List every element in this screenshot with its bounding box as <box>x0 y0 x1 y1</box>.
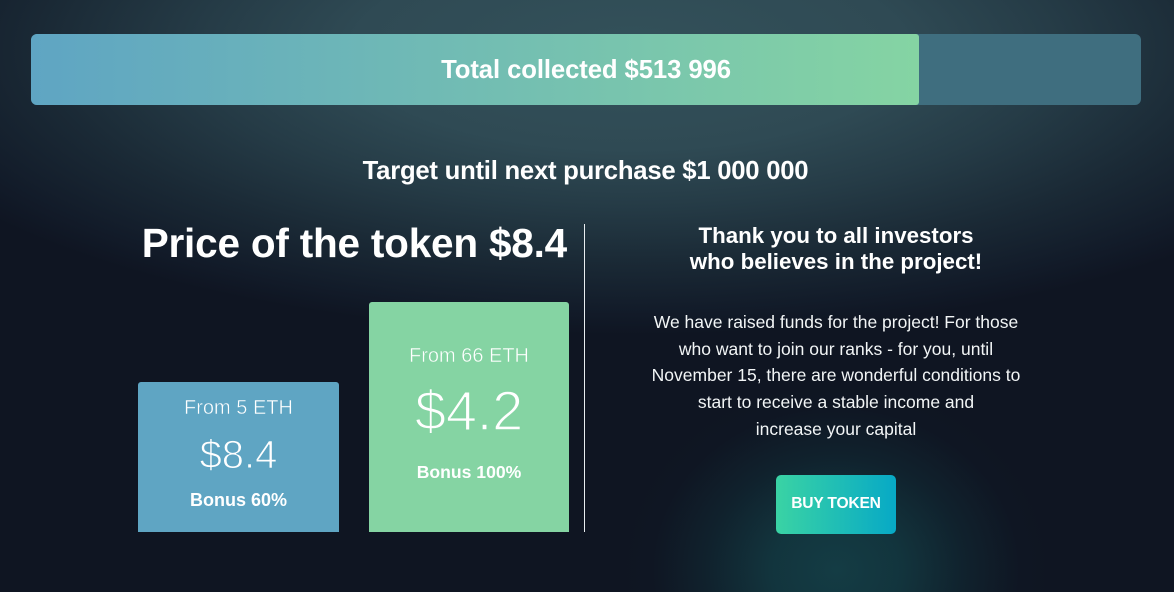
progress bar track <box>31 34 1141 105</box>
thank you heading: Thank you to all investors <box>698 223 974 248</box>
card bonus: Bonus 60% <box>190 490 287 510</box>
price card: from 5 ETH <box>138 382 339 532</box>
card price: $8.4 <box>200 433 277 477</box>
price card: from 66 ETH <box>369 302 569 532</box>
description text: start to receive a stable income and <box>698 392 974 412</box>
card price: $4.2 <box>415 379 523 442</box>
card bonus: Bonus 100% <box>417 462 521 482</box>
thank you heading: who believes in the project! <box>690 249 982 274</box>
description text: We have raised funds for the project! For those <box>654 312 1018 332</box>
token price heading: Price of the token $8.4 <box>142 220 567 266</box>
button label: BUY TOKEN <box>791 495 881 512</box>
description text: increase your capital <box>756 419 916 439</box>
target heading: Target until next purchase $1 000 000 <box>363 157 808 185</box>
total collected label: Total collected $513 996 <box>441 56 731 84</box>
description text: November 15, there are wonderful conditions to <box>652 365 1020 385</box>
vertical divider <box>584 224 585 532</box>
description text <box>652 312 1020 439</box>
thank you heading <box>690 223 982 274</box>
card label: From 5 ETH <box>184 397 293 419</box>
card label: From 66 ETH <box>409 345 529 367</box>
buy token button <box>776 475 896 534</box>
progress bar fill <box>31 34 919 105</box>
description text: who want to join our ranks - for you, until <box>679 339 993 359</box>
